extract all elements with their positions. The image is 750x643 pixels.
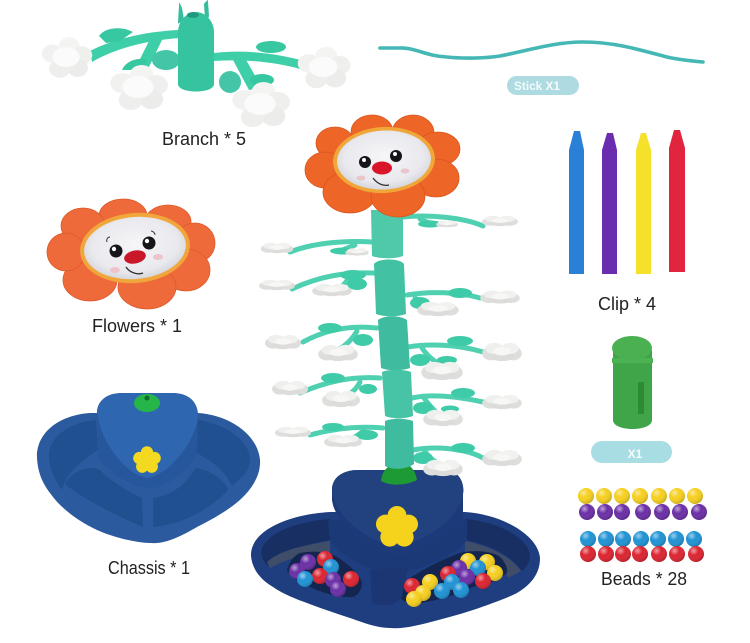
- blue beads: [580, 531, 702, 547]
- right leaves: [410, 220, 475, 464]
- chassis tray: [37, 413, 260, 543]
- label: Beads: Beads * 28: [601, 569, 687, 589]
- tree head flower: [305, 115, 460, 217]
- label pill: X1: [591, 441, 672, 463]
- label pill: Stick X1: [507, 76, 579, 95]
- right bead tray: [400, 551, 507, 603]
- component: branch: [42, 2, 350, 127]
- label: Clip: Clip * 4: [598, 294, 656, 314]
- flower face: [77, 208, 193, 288]
- yellow beads: [578, 488, 703, 504]
- label pill: X1: X1: [628, 447, 643, 461]
- tree branches: [290, 216, 483, 464]
- head petals: [305, 115, 460, 217]
- branch arms and leaves: [90, 28, 304, 93]
- component: stick: [380, 42, 703, 62]
- purple beads: [579, 504, 707, 520]
- label: Chassis: Chassis * 1: [108, 558, 190, 578]
- left bead tray: [287, 552, 362, 597]
- component: beads rows: [578, 488, 707, 562]
- branch cylinder: [179, 2, 208, 22]
- right branches: [403, 216, 483, 462]
- chassis yellow flower: [133, 446, 161, 473]
- left leaves: [318, 248, 378, 440]
- tray beads: right: [404, 553, 503, 607]
- upper tray channels: [261, 519, 331, 566]
- top block surface: [332, 470, 463, 547]
- tree stem: [371, 210, 414, 469]
- base green collar: [381, 466, 417, 485]
- head face: [331, 124, 437, 196]
- branch white flowers: [42, 37, 92, 78]
- clip: purple: [602, 133, 617, 274]
- clip: blue: [569, 131, 584, 274]
- label pill: Stick X1: Stick X1: [514, 81, 561, 93]
- red beads: [580, 546, 704, 562]
- top block side: [332, 470, 463, 556]
- clip: red: [669, 130, 685, 272]
- label: Branch: Branch * 5: [162, 129, 246, 149]
- component: flower: [47, 199, 215, 309]
- component: clips: [569, 130, 685, 274]
- clip: yellow: [636, 133, 651, 274]
- lower block: [328, 520, 467, 573]
- chassis channels and pockets: [49, 420, 250, 527]
- tree white flowers: [259, 216, 522, 476]
- base yellow flower: [376, 506, 418, 547]
- component: chassis: [37, 393, 260, 543]
- component: green plug: [612, 336, 653, 429]
- chassis green knob: [134, 394, 160, 412]
- tray beads: left: [289, 551, 359, 597]
- base tray: [251, 512, 540, 628]
- chassis body: [97, 393, 198, 488]
- flower petals: [47, 199, 215, 309]
- centre divider: [370, 568, 408, 605]
- label: Flowers: Flowers * 1: [92, 316, 182, 336]
- main assembled toy: [251, 115, 540, 628]
- chassis top surface: [97, 393, 198, 478]
- left branches: [290, 241, 383, 439]
